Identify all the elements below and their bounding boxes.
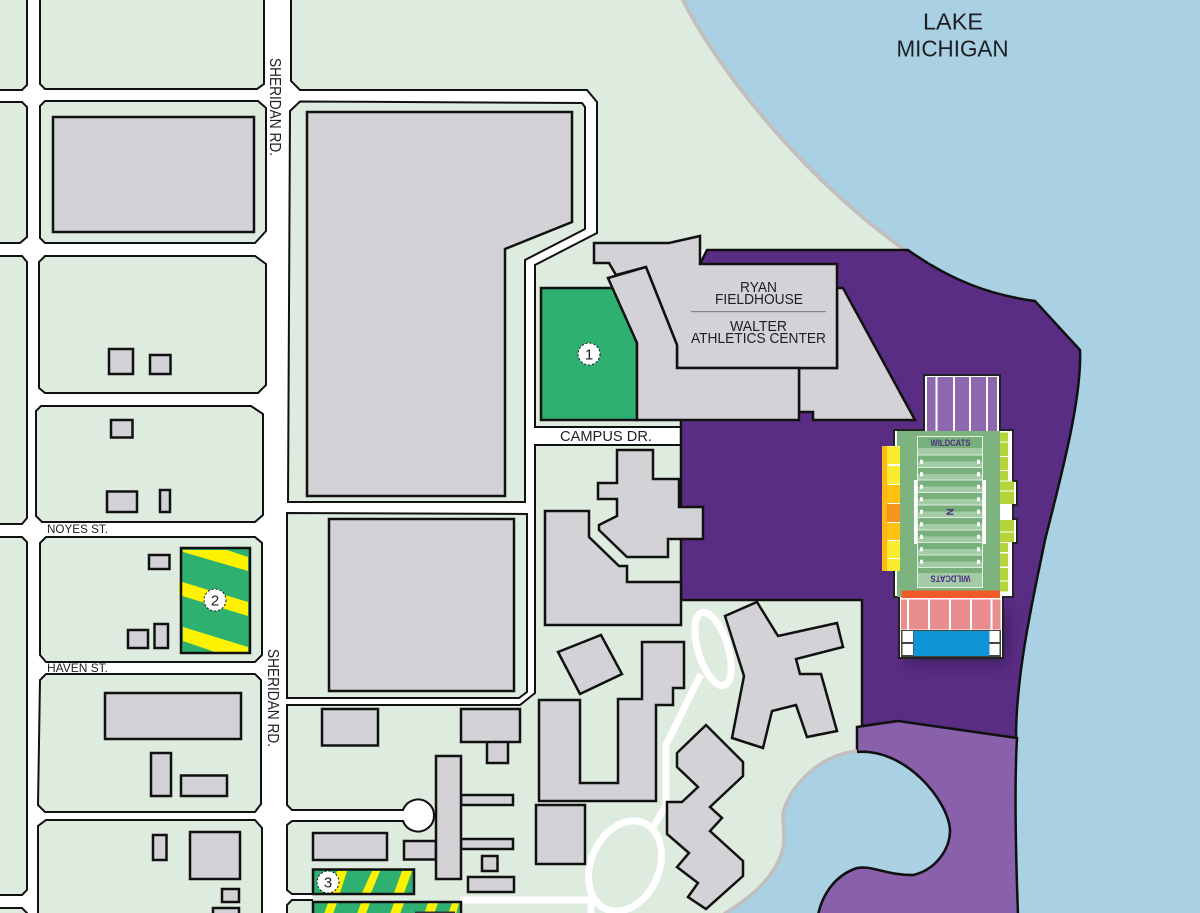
label: Campus Dr.: CAMPUS DR. [560,429,652,445]
south stands [901,600,1000,630]
east stands [1000,432,1014,592]
football field: WILDCATS [930,572,970,584]
label: Haven St.: HAVEN ST. [47,661,108,675]
football field: WILDCATS [930,438,970,449]
building: Ryan Fieldhouse and Walter Athletics Center: RYAN [740,279,777,296]
label: Lake Michigan: LAKE [923,8,983,34]
building: Ryan Fieldhouse and Walter Athletics Center: FIELDHOUSE [715,291,803,308]
label: Lake Michigan [896,8,1008,62]
parking lot 4 [313,902,461,913]
label: Noyes St.: NOYES ST. [47,522,108,536]
south end bar [902,590,1000,598]
field surround [897,431,1000,597]
lake michigan [682,0,1200,913]
west stands [882,446,900,571]
parking lot 1: 1 [585,346,593,364]
football field [914,436,986,588]
west buildings [53,117,254,913]
scoreboard end [901,630,1001,657]
parking lot 2 [179,548,250,653]
south campus buildings [313,450,843,909]
west blocks of Sheridan Rd [36,0,266,913]
stadium drop shadow [908,610,1008,664]
light purple grounds [818,721,1018,913]
label: Lake Michigan: MICHIGAN [896,36,1008,62]
white campus paths [460,608,738,913]
building: Ryan Fieldhouse and Walter Athletics Center [594,236,915,420]
parking lot 1 [541,288,637,420]
parking lot 3: 3 [324,874,332,892]
far-left city blocks [0,0,27,913]
parking lot 3 [313,870,414,894]
label: Sheridan Rd. north: SHERIDAN RD. [266,58,283,156]
large central parking structures [307,112,572,691]
land: campus south block [287,445,862,913]
land: campus north-east block [291,0,1000,427]
bay shoreline [724,751,857,913]
stadium [882,375,1017,658]
stadium outer outline [894,375,1017,658]
parking lot 2: 2 [211,592,219,610]
building: Ryan Fieldhouse and Walter Athletics Center: WALTER [730,318,787,335]
label: Sheridan Rd. south: SHERIDAN RD. [264,649,281,747]
central blocks [287,102,585,698]
bay water [722,752,950,913]
football field: N [944,508,954,516]
shoreline [682,0,905,250]
purple stadium grounds [681,250,1080,738]
building: Ryan Fieldhouse and Walter Athletics Center: ATHLETICS CENTER [691,330,826,347]
north stands [927,377,997,432]
bay edge [818,752,950,913]
